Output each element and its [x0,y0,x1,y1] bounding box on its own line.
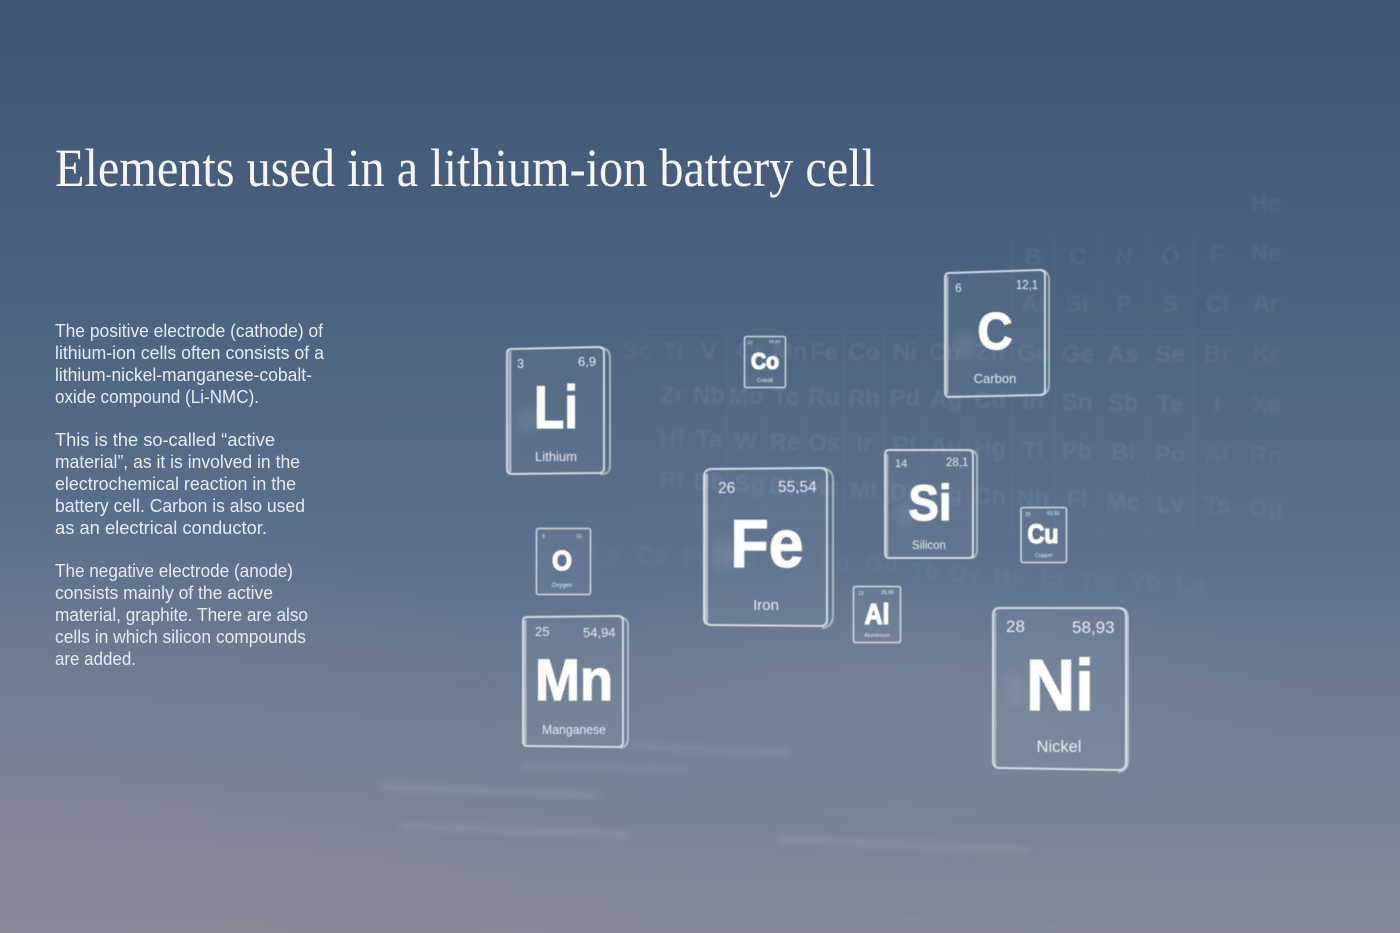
tile: lithium: Li [534,374,578,441]
tile: oxygen: 8 [542,534,545,540]
ghost element symbols, rows 4-7: Pb [1062,438,1092,465]
ghost element symbols, rows 4-7: Ti [663,338,683,365]
ghost element symbols, rows 4-7: Og [1249,495,1283,522]
ghost element symbols, rows 4-7: Bh [769,473,801,500]
ghost element symbols, rows 4-7: Sn [1062,389,1092,416]
ghost element symbols, rows 4-7: Ta [696,426,723,453]
tile: nickel: 58,93 [1072,618,1115,637]
ghost element symbols, rows 4-7: W [735,428,758,455]
paragraph: cathode: lithium-ion cells often consists of a [55,343,325,363]
ghost element symbols, rows 4-7: At [1204,441,1230,468]
tile: nickel [993,608,1128,772]
ghost element symbols, rows 1-3: P [1116,291,1132,318]
ghost element symbols, rows 4-7: Pd [890,385,920,412]
tile: oxygen: O [552,545,572,576]
ghost element symbols, rows 4-7: Mo [729,383,763,410]
ghost element symbols, rows 4-7: Br [1204,341,1230,368]
ghost element symbols, rows 4-7: Tc [773,384,799,411]
ghost lanthanide row: Ce [637,542,667,569]
ghost element symbols, rows 4-7: Bi [1111,439,1135,466]
ghost element symbols, rows 4-7: Ru [808,384,840,411]
tile: aluminium: 13 [858,591,864,597]
tile: copper: 63,55 [1047,511,1060,517]
ghost element symbols, rows 4-7: Lv [1156,491,1185,518]
ghost element symbols, rows 1-3: Al [1021,291,1045,318]
ghost element symbols, rows 1-3: N [1115,244,1133,271]
tile: lithium: 6,9 [578,354,596,369]
ghost element symbols, rows 4-7 [622,338,1283,522]
tile: cobalt: 27 [748,340,754,345]
tile: copper: Copper [1035,553,1053,559]
ghost element symbols, rows 1-3: Ne [1251,240,1281,267]
tile: cobalt: Co [751,348,779,374]
light streaks [380,672,1060,930]
ghost lanthanide row: La [591,541,620,568]
paragraph: active material: battery cell. Carbon is also used [55,496,305,516]
ghost lanthanide row: Tm [1080,567,1116,594]
paragraph: anode: material, graphite. There are also [55,605,308,625]
ghost element symbols, rows 1-3: B [1024,244,1042,271]
paragraph: cathode [55,321,325,407]
tile: carbon: C [978,303,1012,361]
ghost lanthanide row: Er [1040,564,1066,591]
ghost element symbols, rows 1-3: O [1161,243,1179,270]
faded periodic table [591,190,1283,598]
ghost element symbols, rows 1-3: Ar [1253,290,1279,317]
ghost element symbols, rows 4-7: Fe [810,339,838,366]
tile: carbon: 12,1 [1016,278,1038,292]
tile: manganese [523,616,628,748]
ghost element symbols, rows 4-7: Ge [1062,341,1094,368]
ghost element symbols, rows 4-7: In [1022,388,1044,415]
tile: silicon: 14 [895,458,907,470]
tile: silicon: Silicon [912,540,946,552]
ghost element symbols, rows 4-7: Db [693,469,725,496]
ghost element symbols, rows 4-7: Hs [809,474,839,501]
ghost element symbols, rows 1-3 [1021,190,1281,318]
ghost element symbols, rows 1-3: C [1069,244,1087,271]
tile: oxygen [536,528,590,594]
ghost element symbols, rows 1-3: F [1210,241,1224,268]
ghost element symbols, rows 4-7: Sc [622,338,652,365]
tile: carbon: Carbon [974,371,1016,386]
ghost element symbols, rows 4-7: Cn [974,483,1006,510]
ghost element symbols, rows 4-7: Po [1155,441,1185,468]
tile: aluminium [854,586,900,642]
paragraph: anode: consists mainly of the active [55,583,273,603]
ghost lanthanide row: Eu [820,549,850,576]
tile: iron: Iron [753,597,779,614]
ghost lanthanide row: Pr [682,544,708,571]
ghost element symbols, rows 1-3: He [1251,190,1281,217]
tile: oxygen: Oxygen [552,583,572,589]
body text [55,321,325,669]
tile: cobalt [744,336,786,388]
ghost element symbols, rows 4-7: Rf [659,467,686,494]
ghost element symbols, rows 4-7: Mc [1106,489,1140,516]
paragraph: anode: The negative electrode (anode) [55,561,293,581]
ghost element symbols, rows 4-7: Ga [1017,340,1050,367]
ghost element symbols, rows 4-7: Rg [930,481,962,508]
ghost element symbols, rows 4-7: Ir [856,431,872,458]
paragraph: active material: electrochemical reaction in the [55,474,296,494]
tile: cobalt: Cobalt [757,378,773,384]
ghost element symbols, rows 4-7: V [701,338,717,365]
ghost element symbols, rows 4-7: Cr [737,338,763,365]
tile: aluminium: Aluminium [864,633,890,639]
paragraph: active material: This is the so-called “active [55,430,275,450]
tile: lithium: Lithium [535,449,577,464]
ghost element symbols, rows 4-7: Zn [975,339,1005,366]
tile: carbon: 6 [955,281,962,295]
ghost lanthanide row: Pm [771,547,809,574]
ghost element symbols, rows 4-7: Mn [773,338,807,365]
paragraph: anode [55,561,308,669]
ghost element symbols, rows 4-7: I [1214,391,1220,418]
tile: nickel: 28 [1006,617,1025,636]
tile: manganese: 54,94 [583,625,616,640]
tile: iron: 26 [718,480,735,497]
tile: iron [704,468,833,628]
ghost element symbols, rows 4-7: Nb [693,382,725,409]
tile: nickel: Nickel [1037,738,1081,756]
ghost element symbols, rows 4-7: Ts [1204,492,1230,519]
ghost element symbols, rows 4-7: Hf [659,426,686,453]
tile: silicon: Si [908,475,952,531]
tile: aluminium: 26,98 [881,590,894,596]
paragraph: active material [55,430,305,538]
ghost element symbols, rows 4-7: Rn [1250,442,1282,469]
ghost lanthanide row: Lu [1175,571,1205,598]
tile: carbon [945,270,1049,397]
ghost element symbols, rows 4-7: Rh [848,385,880,412]
tile: manganese: Mn [535,648,613,713]
ghost lanthanide row: Yb [1130,569,1160,596]
ghost element symbols, rows 1-3: Si [1066,291,1088,318]
ghost lanthanide row: Gd [865,551,899,578]
ghost element symbols, rows 4-7: Re [770,429,800,456]
tile: silicon: 28,1 [946,457,968,469]
tile: iron: Fe [730,506,804,582]
tile: iron: 55,54 [778,479,817,496]
ghost element symbols, rows 1-3: Cl [1205,291,1229,318]
ghost element symbols, rows 4-7: Xe [1251,391,1281,418]
paragraph: active material: material”, as it is involved in the [55,452,300,472]
tile: manganese: Manganese [542,722,606,737]
ghost element symbols, rows 4-7: Hg [974,435,1006,462]
ghost lanthanide row: Ho [994,562,1026,589]
ghost element symbols, rows 4-7: Cu [929,339,961,366]
ghost element symbols, rows 4-7: Te [1157,391,1183,418]
tile: copper: 29 [1025,512,1031,518]
ghost lanthanide row: Dy [950,561,981,588]
ghost element symbols, rows 4-7: Au [930,434,962,461]
ghost element symbols, rows 4-7: Sg [735,471,765,498]
ghost element symbols, rows 4-7: Ni [893,339,917,366]
tile: manganese: 25 [535,624,549,639]
ghost element symbols, rows 4-7: Co [848,339,880,366]
tile: copper [1021,508,1066,562]
ghost lanthanide row: Tb [910,558,940,585]
ghost element symbols, rows 4-7: Pt [893,432,917,459]
ghost element symbols, rows 1-3: S [1162,291,1178,318]
tile: aluminium: Al [864,599,890,631]
ghost element symbols, rows 4-7: Sb [1108,390,1138,417]
paragraph: cathode: oxide compound (Li-NMC). [55,387,259,407]
ghost element symbols, rows 4-7: Tl [1022,437,1044,464]
title: Elements used in a lithium-ion battery cell [55,138,875,198]
ghost element symbols, rows 4-7: Ag [930,386,962,413]
ghost element symbols, rows 4-7: As [1108,341,1138,368]
ghost element symbols, rows 4-7: Nh [1017,485,1049,512]
ghost element symbols, rows 4-7: Cd [974,387,1006,414]
paragraph: anode: cells in which silicon compounds [55,627,306,647]
ghost element symbols, rows 4-7: Kr [1253,341,1279,368]
ghost lanthanide row: Nd [724,545,756,572]
tile: silicon [885,450,977,558]
tile: copper: Cu [1028,519,1058,549]
table grid lines [640,235,1240,532]
ghost element symbols, rows 4-7: Mt [850,477,878,504]
ghost element symbols, rows 4-7: Zr [660,382,684,409]
paragraph: anode: are added. [55,649,136,669]
ghost element symbols, rows 4-7: Ds [890,479,920,506]
ghost lanthanide row [591,541,1205,598]
paragraph: cathode: The positive electrode (cathode) of [55,321,324,341]
ghost element symbols, rows 4-7: Os [808,430,840,457]
tile: lithium: 3 [517,357,524,371]
ghost element symbols, rows 4-7: Fl [1066,486,1088,513]
tile: oxygen: 16 [576,534,582,540]
tile: nickel: Ni [1026,646,1094,726]
tile: cobalt: 58,93 [769,339,781,344]
paragraph: cathode: lithium-nickel-manganese-cobalt- [55,365,312,385]
tile: lithium [507,347,610,474]
paragraph: active material: as an electrical conductor. [55,518,267,538]
ghost element symbols, rows 4-7: Se [1155,341,1185,368]
